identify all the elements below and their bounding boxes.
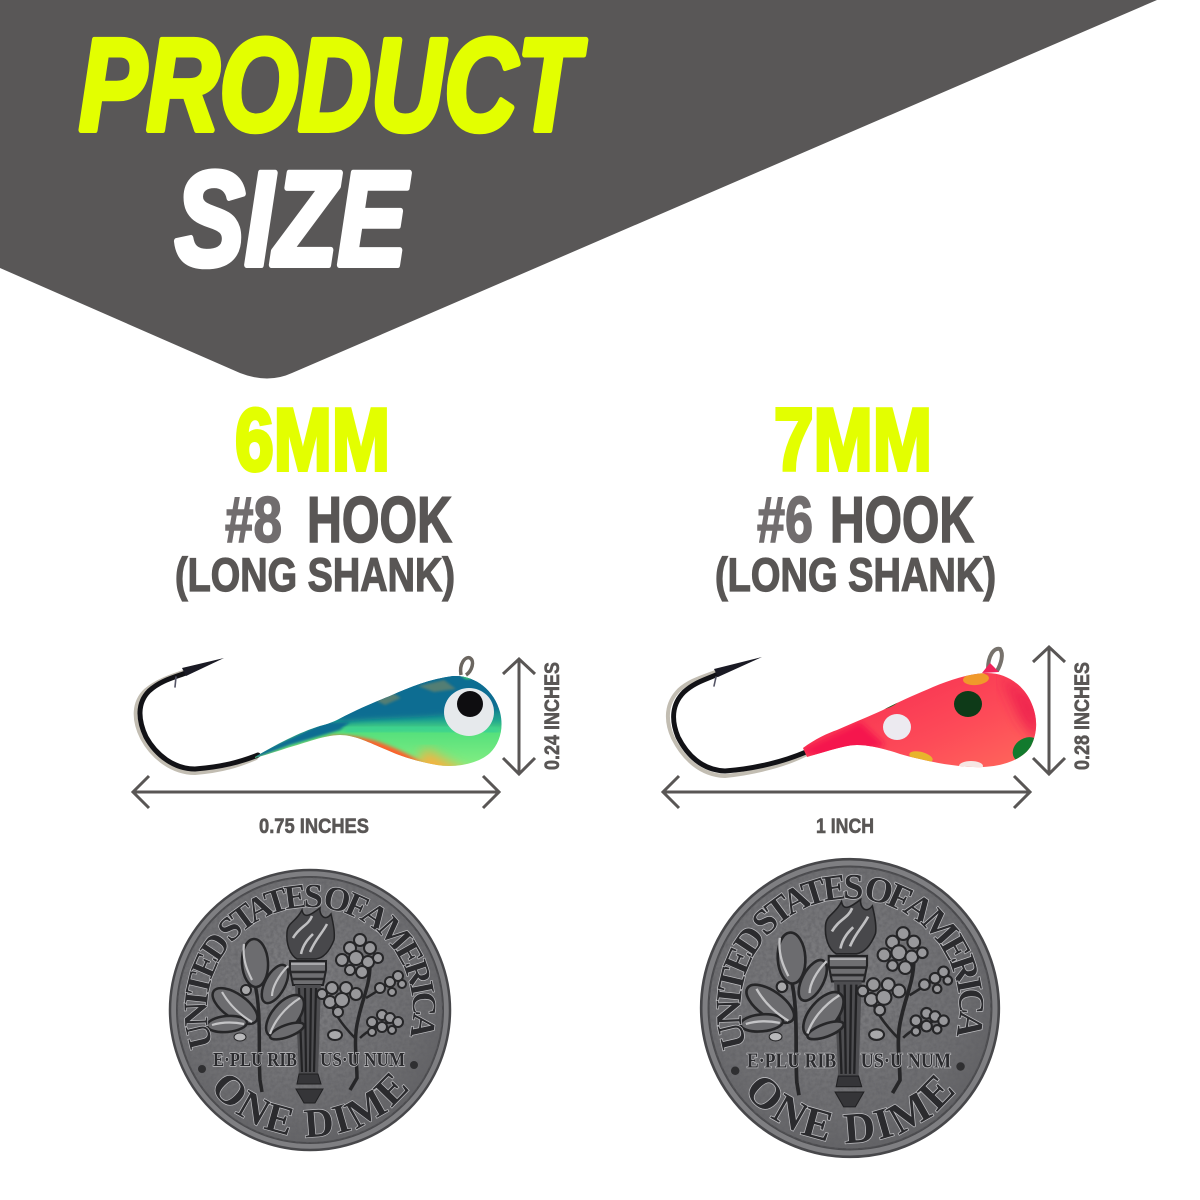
dimension label: 0.28 inches: 0.28 INCHES bbox=[1071, 662, 1094, 770]
dimension arrow: 6mm width bbox=[133, 776, 499, 808]
dimension arrow: 7mm width bbox=[663, 776, 1030, 808]
long shank note: (LONG SHANK) bbox=[715, 548, 996, 601]
hook point bbox=[182, 658, 224, 676]
title word: size: SIZE bbox=[175, 145, 410, 294]
coin: dime left: US·U NUM bbox=[320, 1049, 405, 1071]
title bbox=[79, 11, 587, 294]
body bbox=[255, 676, 502, 766]
coin: dime left: E·PLU RIB bbox=[213, 1049, 297, 1071]
coin: dime right bbox=[700, 858, 1000, 1158]
dimension label: 1 inch: 1 INCH bbox=[816, 815, 874, 838]
coin: dime left: ONE DIME bbox=[214, 1072, 410, 1138]
coin: dime left: UNITED STATES OF AMERICA bbox=[184, 884, 436, 1051]
coin: dime right: ONE DIME bbox=[748, 1074, 956, 1144]
coin: dime right: US·U NUM bbox=[861, 1049, 951, 1073]
title word: product: PRODUCT bbox=[79, 11, 587, 158]
body bbox=[803, 673, 1036, 768]
hook number: #8 bbox=[225, 483, 282, 556]
hook number: #6 bbox=[757, 483, 813, 556]
long shank note: (LONG SHANK) bbox=[175, 548, 455, 601]
dimension arrow: 6mm height bbox=[503, 659, 535, 774]
dimension label: 0.24 inches: 0.24 INCHES bbox=[541, 662, 564, 770]
coin: dime right: E·PLU RIB bbox=[747, 1049, 836, 1073]
column: 6mm heading bbox=[175, 390, 455, 601]
jig: 7mm pink dotted bbox=[668, 649, 1046, 776]
banner bbox=[0, 0, 1157, 378]
dimension arrow: 7mm height bbox=[1033, 647, 1065, 774]
size label: 7MM bbox=[774, 390, 932, 489]
coin: dime left bbox=[168, 868, 452, 1152]
hook bbox=[668, 671, 806, 776]
size label: 6MM bbox=[235, 390, 390, 489]
hook word: HOOK bbox=[830, 483, 974, 556]
coin: dime right: UNITED STATES OF AMERICA bbox=[716, 874, 984, 1052]
hook bbox=[136, 671, 258, 773]
eyelet bbox=[461, 658, 473, 675]
spots bbox=[963, 673, 989, 686]
column: 7mm heading bbox=[715, 390, 996, 601]
dimension label: 0.75 inches: 0.75 INCHES bbox=[259, 815, 369, 838]
hook word: HOOK bbox=[307, 483, 452, 556]
hook point bbox=[714, 657, 762, 677]
eyelet bbox=[988, 649, 1002, 671]
jig: 6mm blue green bbox=[136, 658, 510, 780]
eye bbox=[444, 688, 494, 736]
